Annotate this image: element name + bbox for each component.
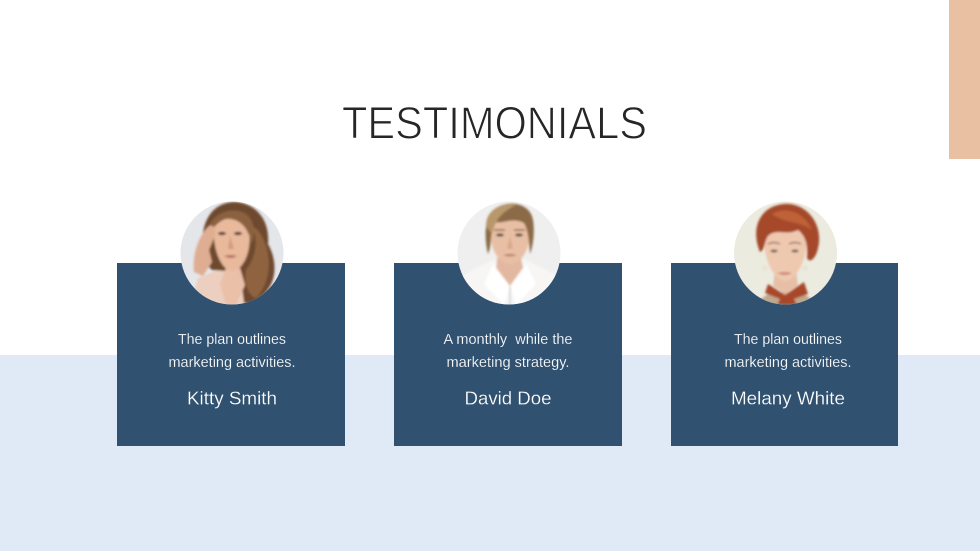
portrait: Melany White (734, 201, 838, 305)
panel: Kitty Smith testimonial: marketing activities. (168, 355, 296, 371)
panel: David Doe testimonial: marketing strategy. (446, 355, 570, 371)
panel: Melany White testimonial (671, 201, 898, 446)
title: TESTIMONIALS (342, 97, 647, 148)
card background (671, 263, 898, 446)
panel: Kitty Smith testimonial (117, 201, 345, 446)
name: David Doe (464, 388, 552, 408)
background band (0, 355, 980, 551)
testimonial text: The plan outlines (178, 332, 286, 348)
portrait: David Doe (455, 201, 562, 305)
panel: David Doe testimonial (394, 201, 622, 446)
panel: Melany White testimonial: marketing activities. (724, 355, 852, 371)
corner accent (949, 0, 980, 159)
portrait: Kitty Smith (180, 201, 284, 305)
name: Kitty Smith (187, 388, 277, 408)
testimonial text: The plan outlines (734, 332, 842, 348)
testimonial text: A monthly while the (444, 332, 572, 348)
card background (117, 263, 345, 446)
card background (394, 263, 622, 446)
name: Melany White (731, 388, 845, 408)
